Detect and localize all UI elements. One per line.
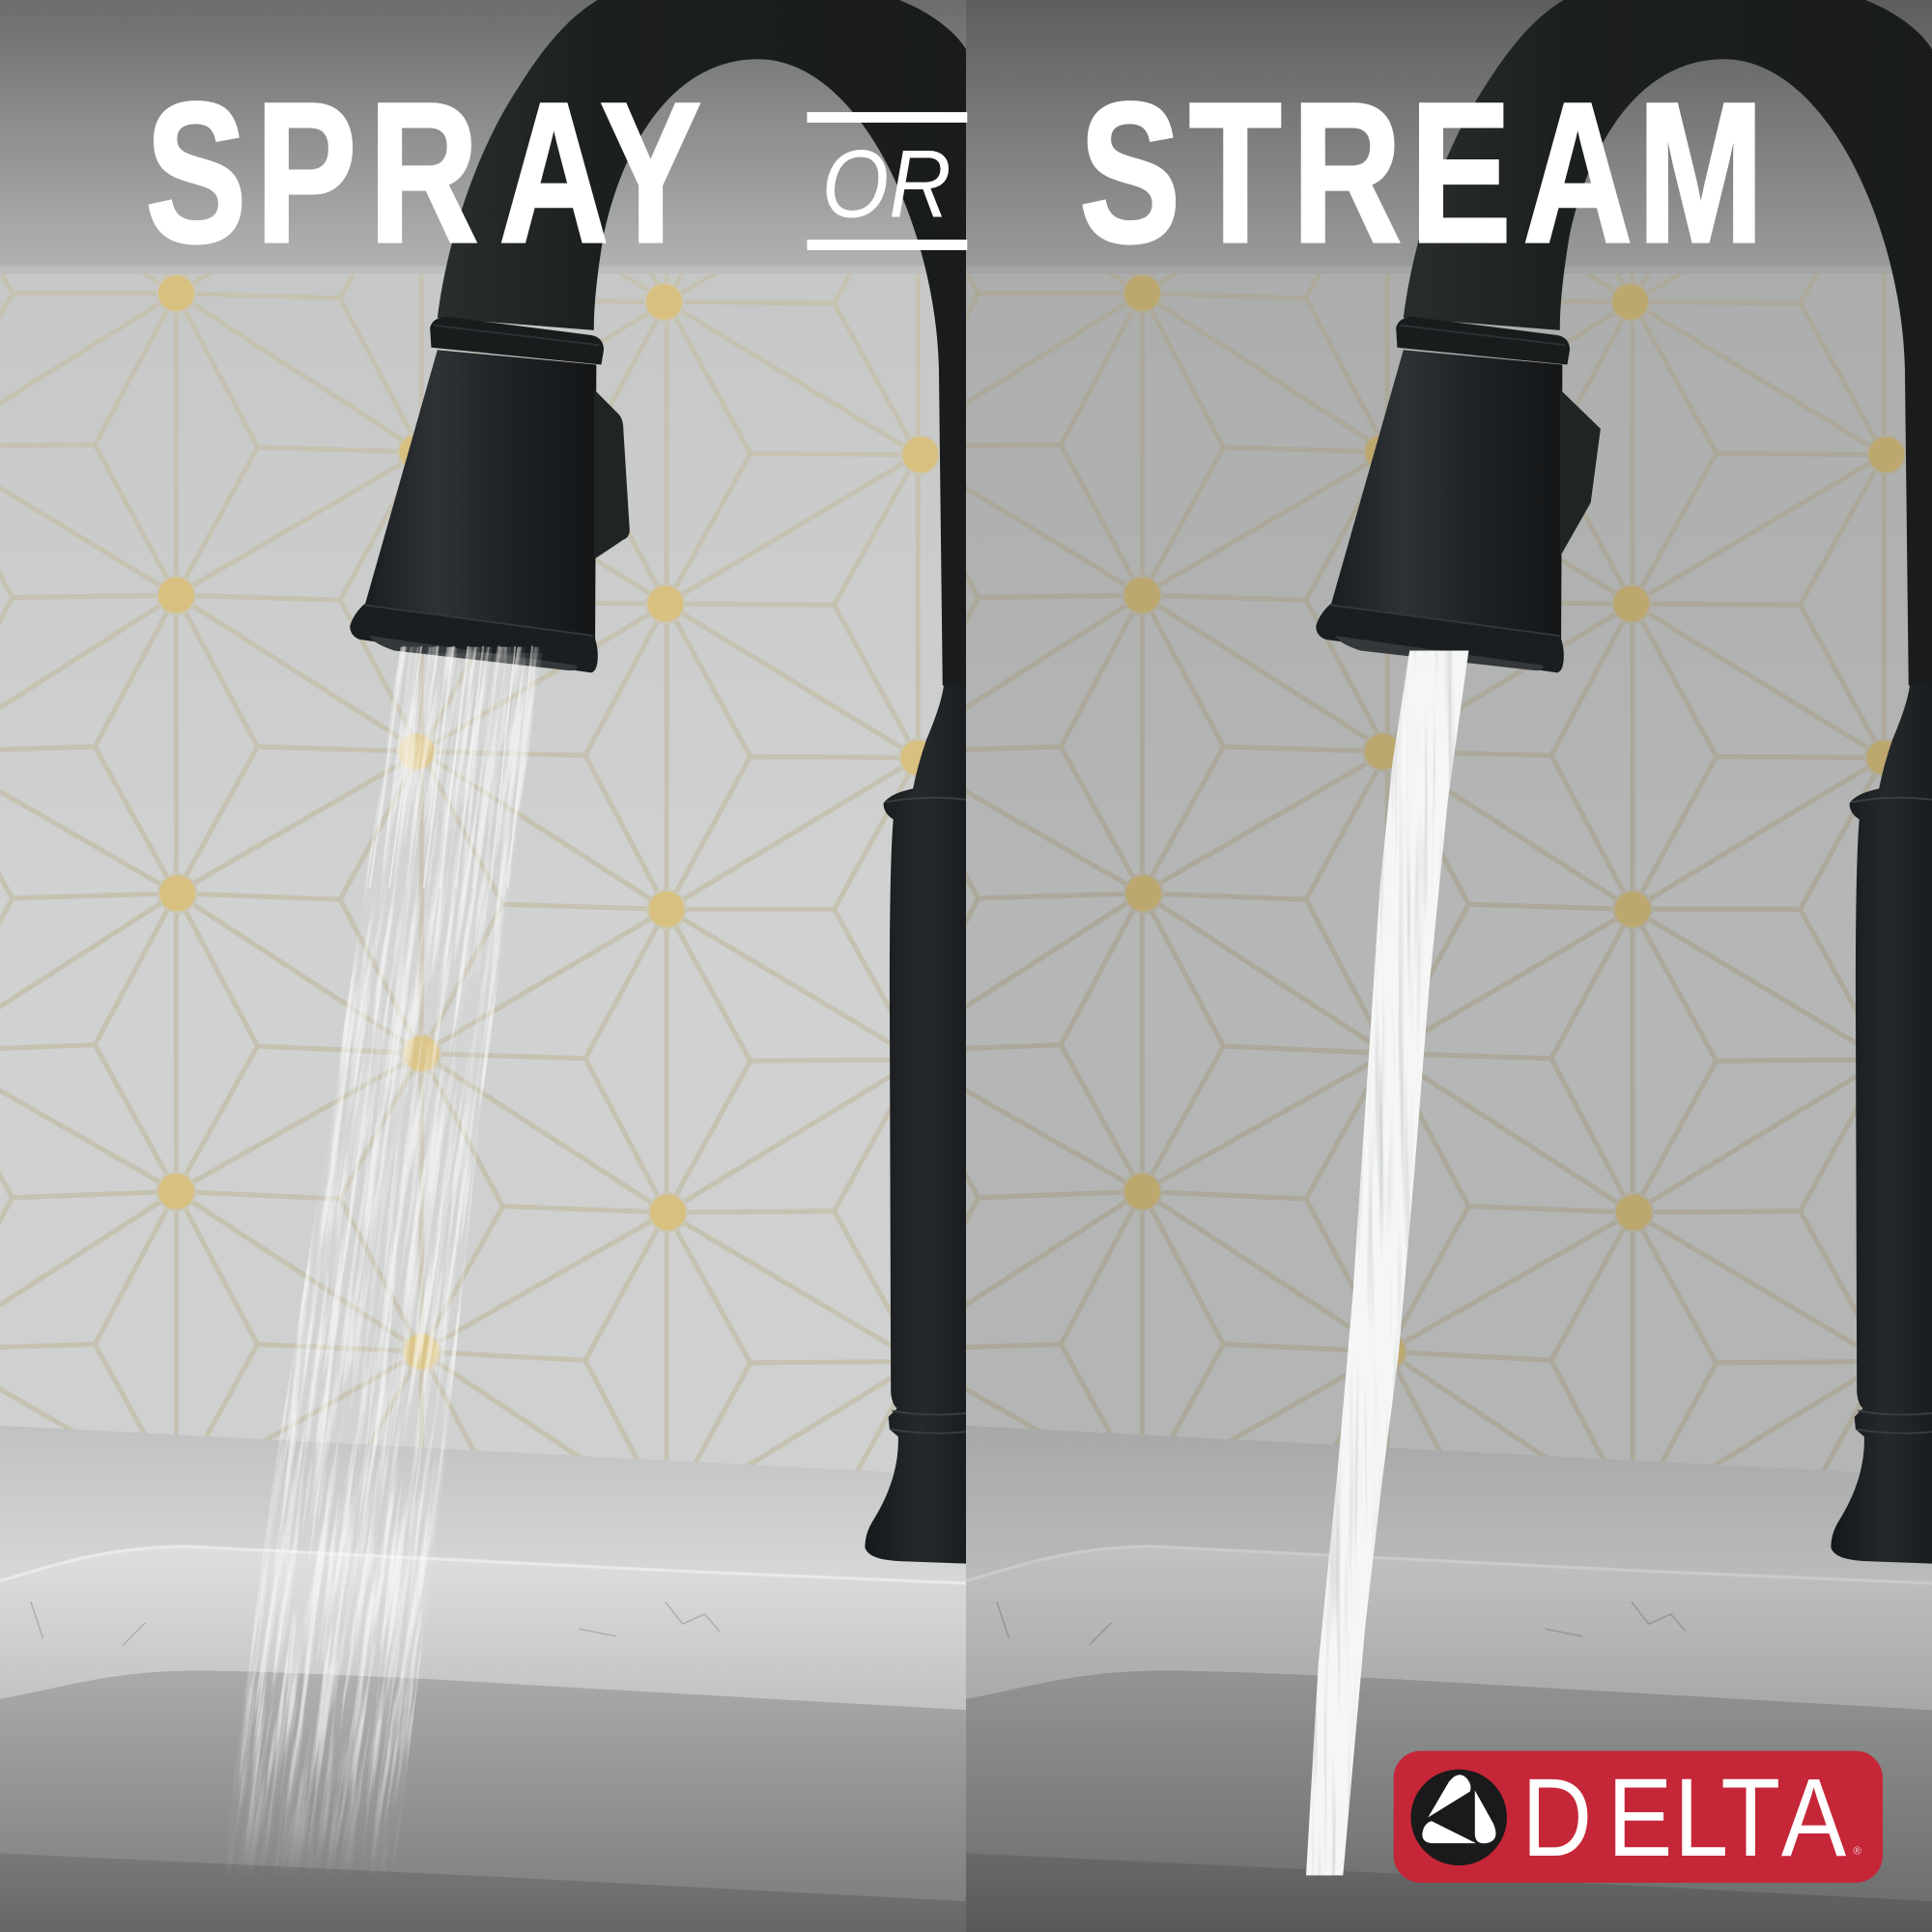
divider line top [807,112,967,123]
water: spray streaks [234,645,542,1861]
wordmark: DELTA [1521,1755,1846,1879]
faucet, stream side [1316,0,1932,1564]
or label: OR [822,130,952,238]
water: solid stream [1306,650,1468,1875]
logo: delta [1394,1750,1883,1883]
backsplash and sink scene, stream side [897,0,1932,1932]
or divider [807,112,967,250]
faucet, spray side [350,0,966,1564]
logo badge [1394,1750,1883,1883]
title: stream: STREAM [1079,61,1764,284]
divider line bottom [807,240,967,250]
logo mark [1410,1770,1507,1865]
darker shade over stream side [966,0,1932,1932]
title: spray: SPRAY [146,61,701,284]
registered mark: ® [1853,1846,1861,1858]
backsplash and sink scene, spray side [0,0,966,1932]
panel: stream [897,0,1932,1932]
panel: spray [0,0,966,1932]
